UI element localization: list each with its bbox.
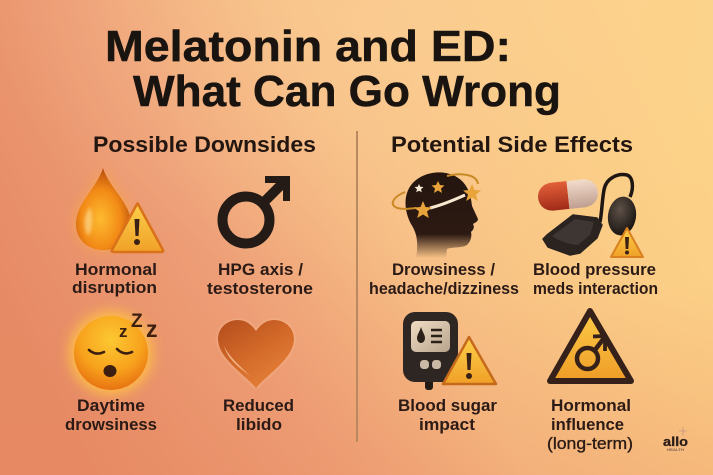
label: daytime drowsiness: Daytime [77,397,145,415]
heading: possible downsides: Possible Downsides [93,132,316,157]
icon: hormone drop with warning [76,168,163,252]
label: hormonal disruption [72,261,157,297]
icon: sleepy face: z [146,316,158,342]
logo: allo health: allo [663,434,688,449]
label: daytime drowsiness: drowsiness [65,416,157,434]
title [105,22,561,116]
label: hormonal influence long-term: (long-term) [547,435,633,453]
label: hormonal influence long-term [547,397,633,453]
label: drowsiness headache dizziness [369,261,519,298]
label: blood pressure meds interaction [533,261,658,298]
label: hormonal influence long-term: Hormonal [551,397,631,415]
label: hormonal disruption: Hormonal [75,261,157,279]
icon: sleepy face: Z [131,311,143,332]
icon: sleepy face: z [119,322,128,341]
label: hormonal influence long-term: influence [551,416,624,434]
label: HPG axis / testosterone: HPG axis / [218,261,303,279]
icon: warning triangle with male symbol [550,311,631,381]
label: blood sugar impact: Blood sugar [398,397,498,415]
icon: sleepy face [69,311,158,395]
panel: potential side effects [369,172,658,453]
icon: glucose meter with warning [403,312,496,390]
label: reduced libido: Reduced [223,397,294,415]
icon: pill and blood pressure cuff [537,175,643,257]
label: reduced libido: libido [236,416,282,434]
logo: allo health: HEALTH [667,448,685,452]
icon: male symbol [222,176,290,244]
title: Melatonin and ED: [105,22,511,71]
label: reduced libido [223,397,294,434]
panel: possible downsides [65,168,313,434]
label: daytime drowsiness [65,397,157,434]
label: HPG axis / testosterone: testosterone [207,280,313,298]
heading: potential side effects: Potential Side Effects [391,132,633,157]
icon: dizzy head [393,172,481,258]
label: blood pressure meds interaction: Blood pressure [533,261,656,279]
label: hormonal disruption: disruption [72,279,157,297]
label: drowsiness headache dizziness: headache/dizziness [369,280,519,298]
label: blood sugar impact [398,397,498,434]
logo: allo health [663,427,688,452]
label: blood sugar impact: impact [419,416,476,434]
label: drowsiness headache dizziness: Drowsiness / [392,261,495,279]
label: HPG axis / testosterone [207,261,313,298]
label: blood pressure meds interaction: meds interaction [533,280,658,298]
icon: heart [218,320,294,388]
title: What Can Go Wrong [133,67,561,116]
